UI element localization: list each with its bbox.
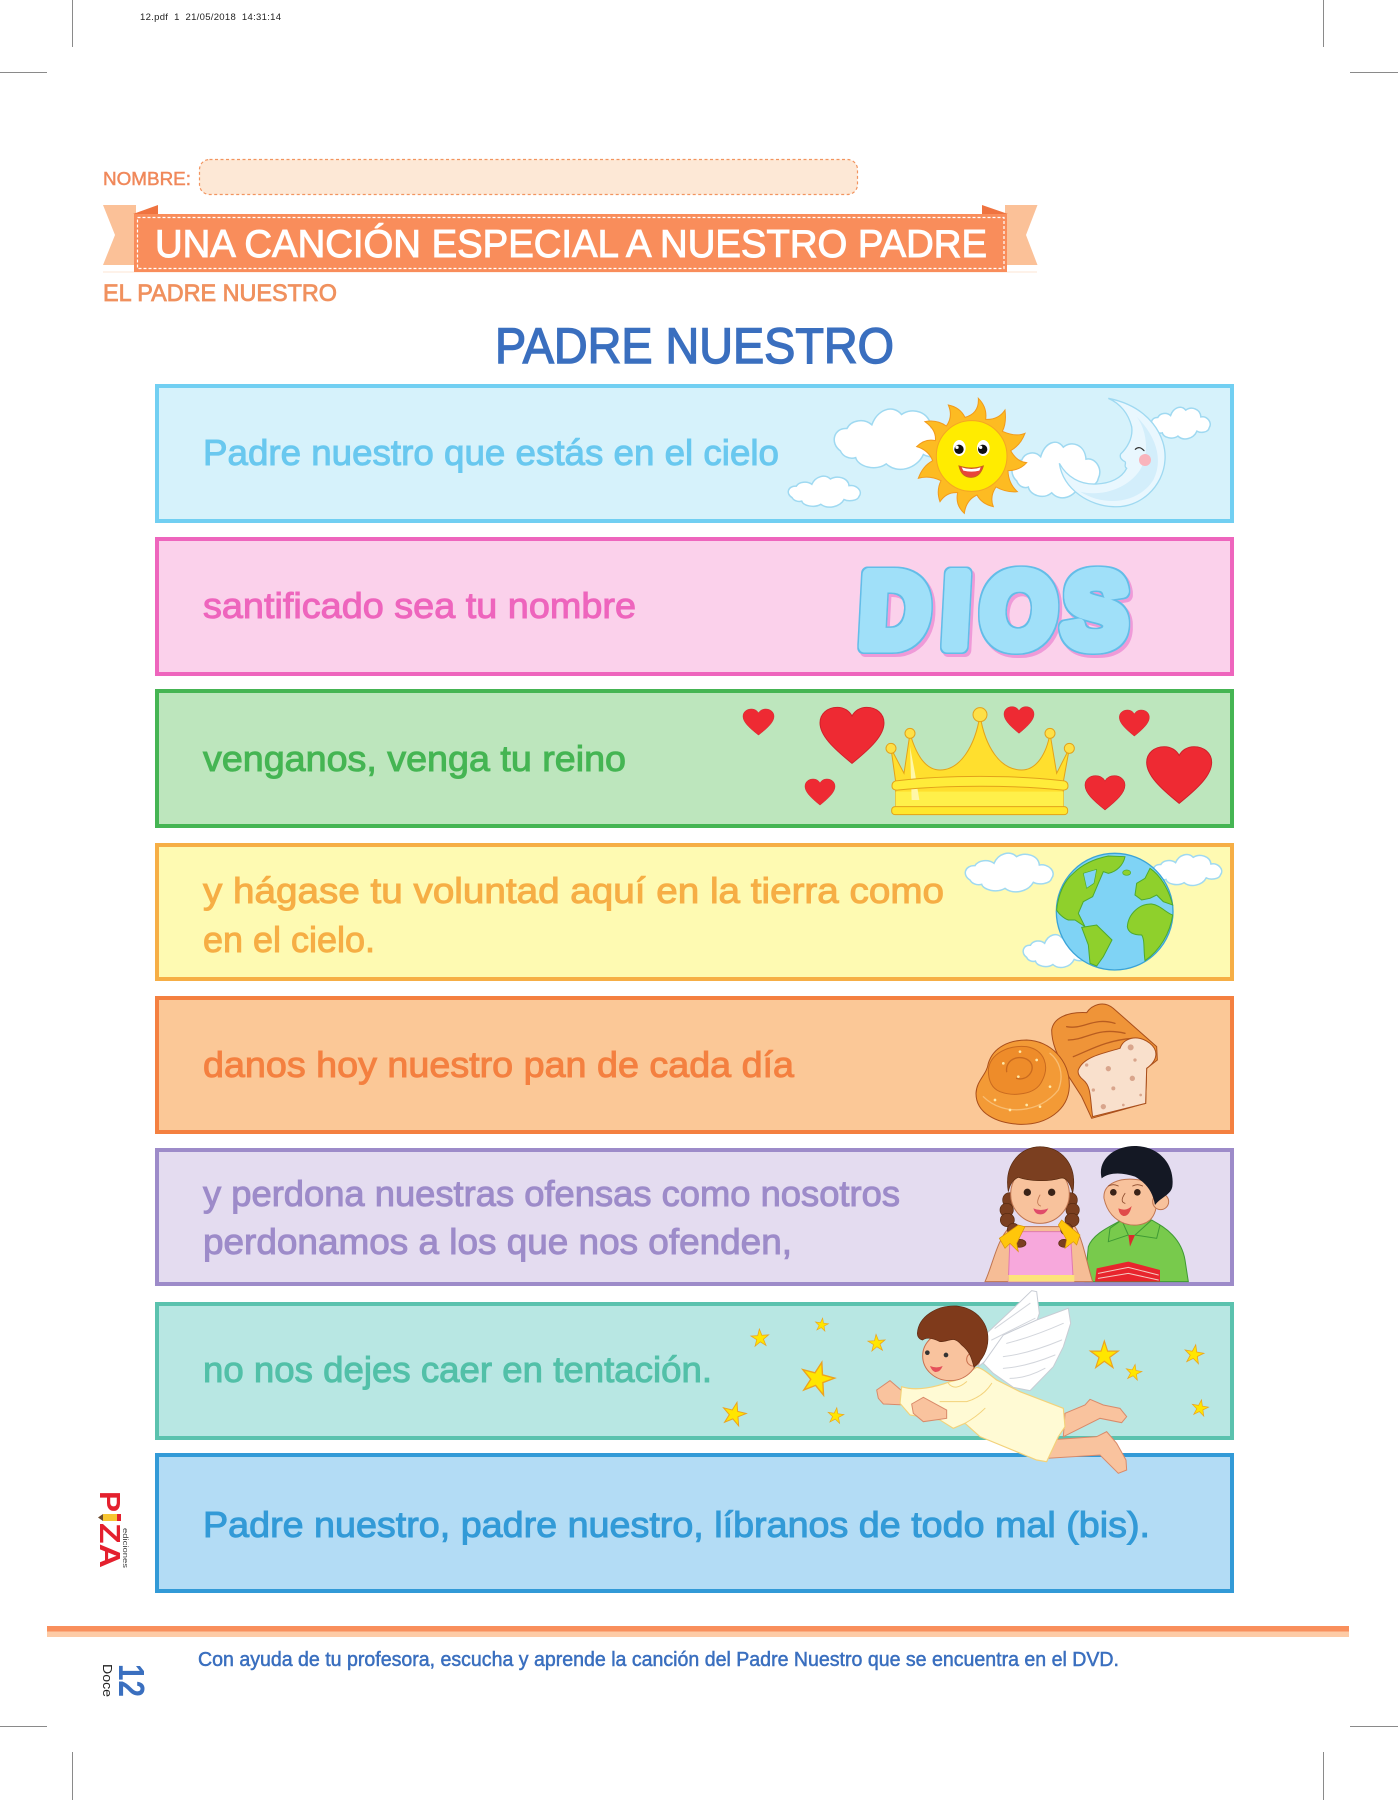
panel: line 4 earth bbox=[157, 845, 1232, 979]
footer instruction: Con ayuda de tu profesora, escucha y aprende la canción del Padre Nuestro que se encuentra en el DVD. bbox=[198, 1649, 1119, 1671]
page number: 12 bbox=[111, 1664, 152, 1697]
main heading: PADRE NUESTRO bbox=[495, 318, 894, 374]
panel: line 5 bread bbox=[157, 998, 1232, 1132]
icon: pencil bbox=[98, 1514, 121, 1521]
publisher logo: ZA bbox=[93, 1523, 125, 1568]
icon: DIOS lettering: DIOS bbox=[857, 552, 1130, 669]
panel: line 4 earth: en el cielo. bbox=[203, 919, 375, 960]
line 2 text: santificado sea tu nombre bbox=[203, 585, 636, 626]
subtitle: EL PADRE NUESTRO bbox=[103, 280, 337, 307]
ribbon tails bbox=[103, 205, 1038, 265]
panel: line 7 temptation bbox=[157, 1304, 1232, 1438]
title ribbon bbox=[103, 205, 1038, 272]
name label: NOMBRE: bbox=[103, 168, 191, 189]
page number in words: Doce bbox=[100, 1664, 115, 1697]
publisher logo bbox=[93, 1491, 128, 1569]
line 5 text: danos hoy nuestro pan de cada día bbox=[203, 1044, 795, 1085]
icon: angel and stars bbox=[720, 1291, 1210, 1473]
icon: crown and hearts bbox=[743, 707, 1212, 815]
panel: line 6 children: perdonamos a los que nos ofenden, bbox=[203, 1221, 792, 1262]
icon: sun, moon and clouds bbox=[788, 398, 1210, 513]
panel: line 2 name of God bbox=[157, 539, 1232, 674]
line 1 text: Padre nuestro que estás en el cielo bbox=[203, 432, 779, 473]
name input box bbox=[200, 160, 858, 194]
ribbon folds bbox=[133, 205, 1008, 214]
line 8 text: Padre nuestro, padre nuestro, líbranos de todo mal (bis). bbox=[203, 1504, 1150, 1545]
ribbon title: UNA CANCIÓN ESPECIAL A NUESTRO PADRE bbox=[155, 223, 987, 266]
panel: line 1 sky bbox=[157, 386, 1232, 521]
line 4 text: y hágase tu voluntad aquí en la tierra como bbox=[203, 870, 944, 911]
panel: line 6 children bbox=[157, 1146, 1232, 1284]
line 7 text: no nos dejes caer en tentación. bbox=[203, 1349, 712, 1390]
line 6 text: y perdona nuestras ofensas como nosotros bbox=[203, 1173, 900, 1214]
icon: girl and boy bbox=[985, 1146, 1188, 1282]
ribbon body bbox=[134, 214, 1007, 272]
icon: bread loaf and bun bbox=[976, 1004, 1157, 1124]
print slug: 12.pdf 1 21/05/2018 14:31:14 bbox=[140, 12, 281, 23]
line 3 text: venganos, venga tu reino bbox=[203, 738, 626, 779]
panel: line 3 kingdom bbox=[157, 691, 1232, 826]
icon: globe and clouds bbox=[965, 853, 1222, 970]
panel: line 8 deliver us bbox=[157, 1455, 1232, 1591]
publisher logo: ediciones bbox=[121, 1528, 128, 1569]
name field bbox=[103, 160, 858, 194]
publisher logo: P bbox=[93, 1491, 125, 1512]
footer rule bbox=[47, 1626, 1349, 1637]
